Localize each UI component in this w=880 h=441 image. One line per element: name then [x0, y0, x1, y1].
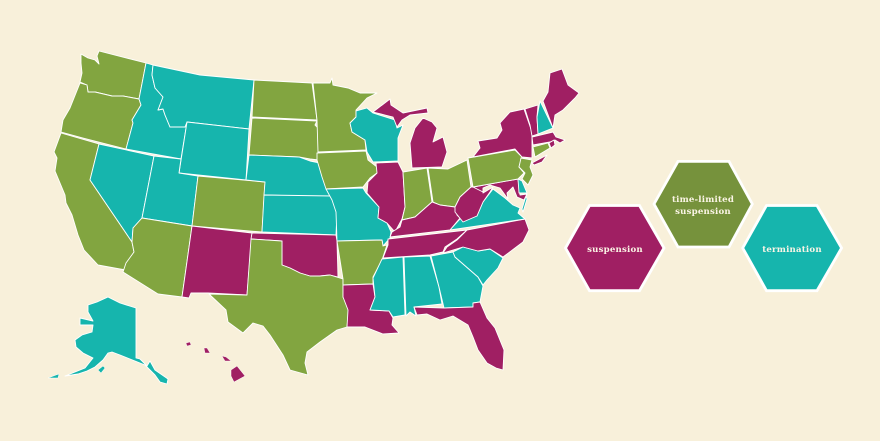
state: Michigan lower peninsula — [410, 118, 447, 168]
legend: termination — [743, 206, 842, 291]
state: Illinois — [367, 162, 405, 232]
state: Massachusetts — [532, 132, 565, 145]
state: Michigan upper peninsula — [373, 99, 428, 127]
state: Oklahoma — [251, 233, 338, 277]
state: Missouri — [326, 188, 391, 246]
state: Hawaii Oahu — [204, 348, 210, 353]
state: Georgia — [431, 252, 483, 308]
state: North Dakota — [252, 80, 317, 120]
state: Hawaii Maui — [222, 356, 231, 361]
legend: time-limited suspension — [654, 161, 752, 247]
state: Iowa — [317, 151, 377, 189]
island: Kodiak — [98, 366, 105, 373]
state: Nevada — [90, 144, 154, 242]
state: Connecticut — [533, 143, 550, 157]
state: Wyoming — [179, 122, 249, 180]
state: Kentucky — [390, 202, 460, 237]
state: Oregon — [61, 83, 141, 149]
state: Arkansas — [337, 240, 387, 285]
state: Mississippi — [370, 257, 405, 317]
state: Louisiana — [343, 284, 399, 334]
state: Minnesota — [313, 78, 377, 152]
islands: Aleutians — [48, 374, 59, 378]
state: California — [54, 133, 134, 270]
state: Washington — [80, 51, 146, 99]
state: Alaska — [65, 297, 168, 384]
state: New York — [473, 109, 532, 158]
state: Texas — [209, 239, 349, 375]
state: Idaho — [126, 63, 187, 159]
state: Colorado — [192, 176, 265, 232]
state: Delaware — [518, 179, 527, 193]
state: Indiana — [402, 168, 432, 220]
state: Vermont — [525, 105, 538, 136]
state: Long Island — [532, 155, 547, 165]
state: Maine — [543, 69, 579, 128]
legend: suspension — [566, 206, 664, 291]
state: Virginia — [450, 189, 525, 230]
state: Nebraska — [246, 155, 333, 197]
state: Florida — [414, 302, 504, 370]
state: New Hampshire — [537, 101, 553, 134]
state: Montana — [152, 65, 254, 129]
legend: suspension: suspension — [587, 245, 643, 255]
map: United States by policy type — [48, 51, 579, 384]
legend: time-limited suspension: suspension — [675, 207, 731, 217]
state: North Carolina — [443, 219, 529, 257]
state: New Jersey — [519, 158, 533, 185]
state: Arizona — [123, 218, 192, 297]
state: Utah — [142, 156, 198, 226]
state: New Mexico — [182, 226, 252, 298]
state: Maryland — [473, 179, 527, 200]
state: Hawaii Kauai — [186, 342, 191, 346]
legend — [566, 161, 842, 291]
state: Virginia eastern shore — [522, 196, 527, 212]
state: Tennessee — [383, 230, 467, 258]
state: Rhode Island — [549, 140, 555, 148]
state: Alabama — [404, 256, 442, 316]
state: Hawaii big island — [231, 366, 245, 382]
state: Pennsylvania — [468, 150, 524, 187]
state: Wisconsin — [350, 108, 403, 162]
legend: termination: termination — [762, 245, 822, 255]
state: South Dakota — [249, 118, 320, 160]
state: South Carolina — [453, 247, 503, 285]
state: Ohio — [428, 160, 471, 207]
legend: time-limited suspension: time-limited — [672, 195, 734, 205]
state: West Virginia — [455, 187, 493, 222]
state: Kansas — [262, 195, 337, 235]
